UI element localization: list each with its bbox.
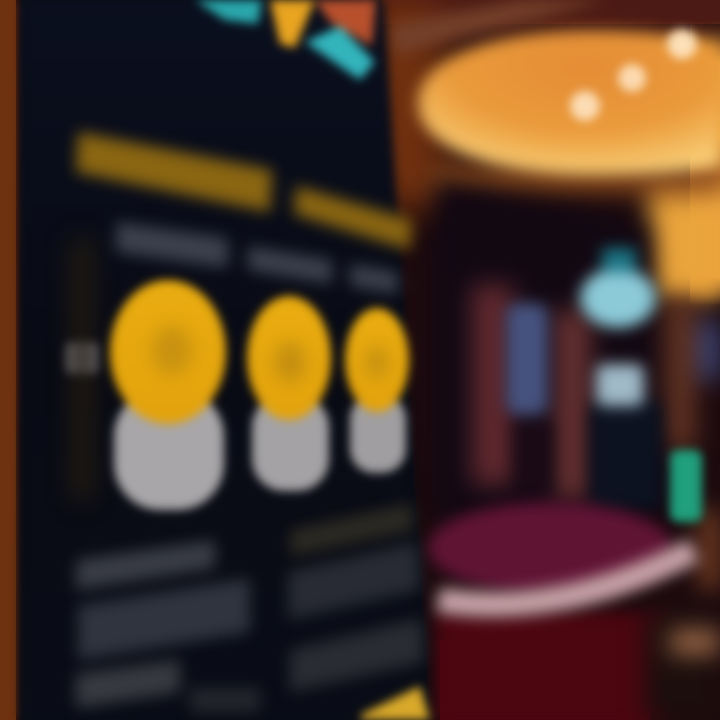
wood pillar and beams [360, 0, 720, 210]
diagonal ceiling beam [390, 0, 610, 55]
board heading [76, 132, 412, 250]
warm band under ceiling [430, 165, 720, 300]
top colour badge [195, 0, 376, 80]
column one: gold coin [110, 280, 226, 424]
infographic board [20, 0, 430, 720]
column outlines [72, 240, 92, 500]
lower right text block [288, 503, 424, 692]
column two: gold coin [247, 296, 331, 420]
gold corner badge [360, 686, 430, 720]
lower left text block [76, 540, 260, 712]
column three: gold coin [345, 308, 409, 412]
row label marker [66, 342, 98, 374]
golden ceiling light [418, 30, 720, 175]
column two: grey base [252, 395, 329, 491]
stools lower right [645, 610, 720, 720]
board subheading [116, 222, 398, 294]
column three: grey base [350, 395, 406, 473]
left wood strip [0, 0, 16, 720]
maroon table [428, 502, 672, 720]
slot machines [506, 248, 662, 510]
green accent [670, 450, 702, 522]
ceiling lamps [570, 29, 697, 121]
table rim [438, 550, 694, 604]
column one: grey base [114, 390, 224, 510]
dark back room [435, 178, 720, 590]
